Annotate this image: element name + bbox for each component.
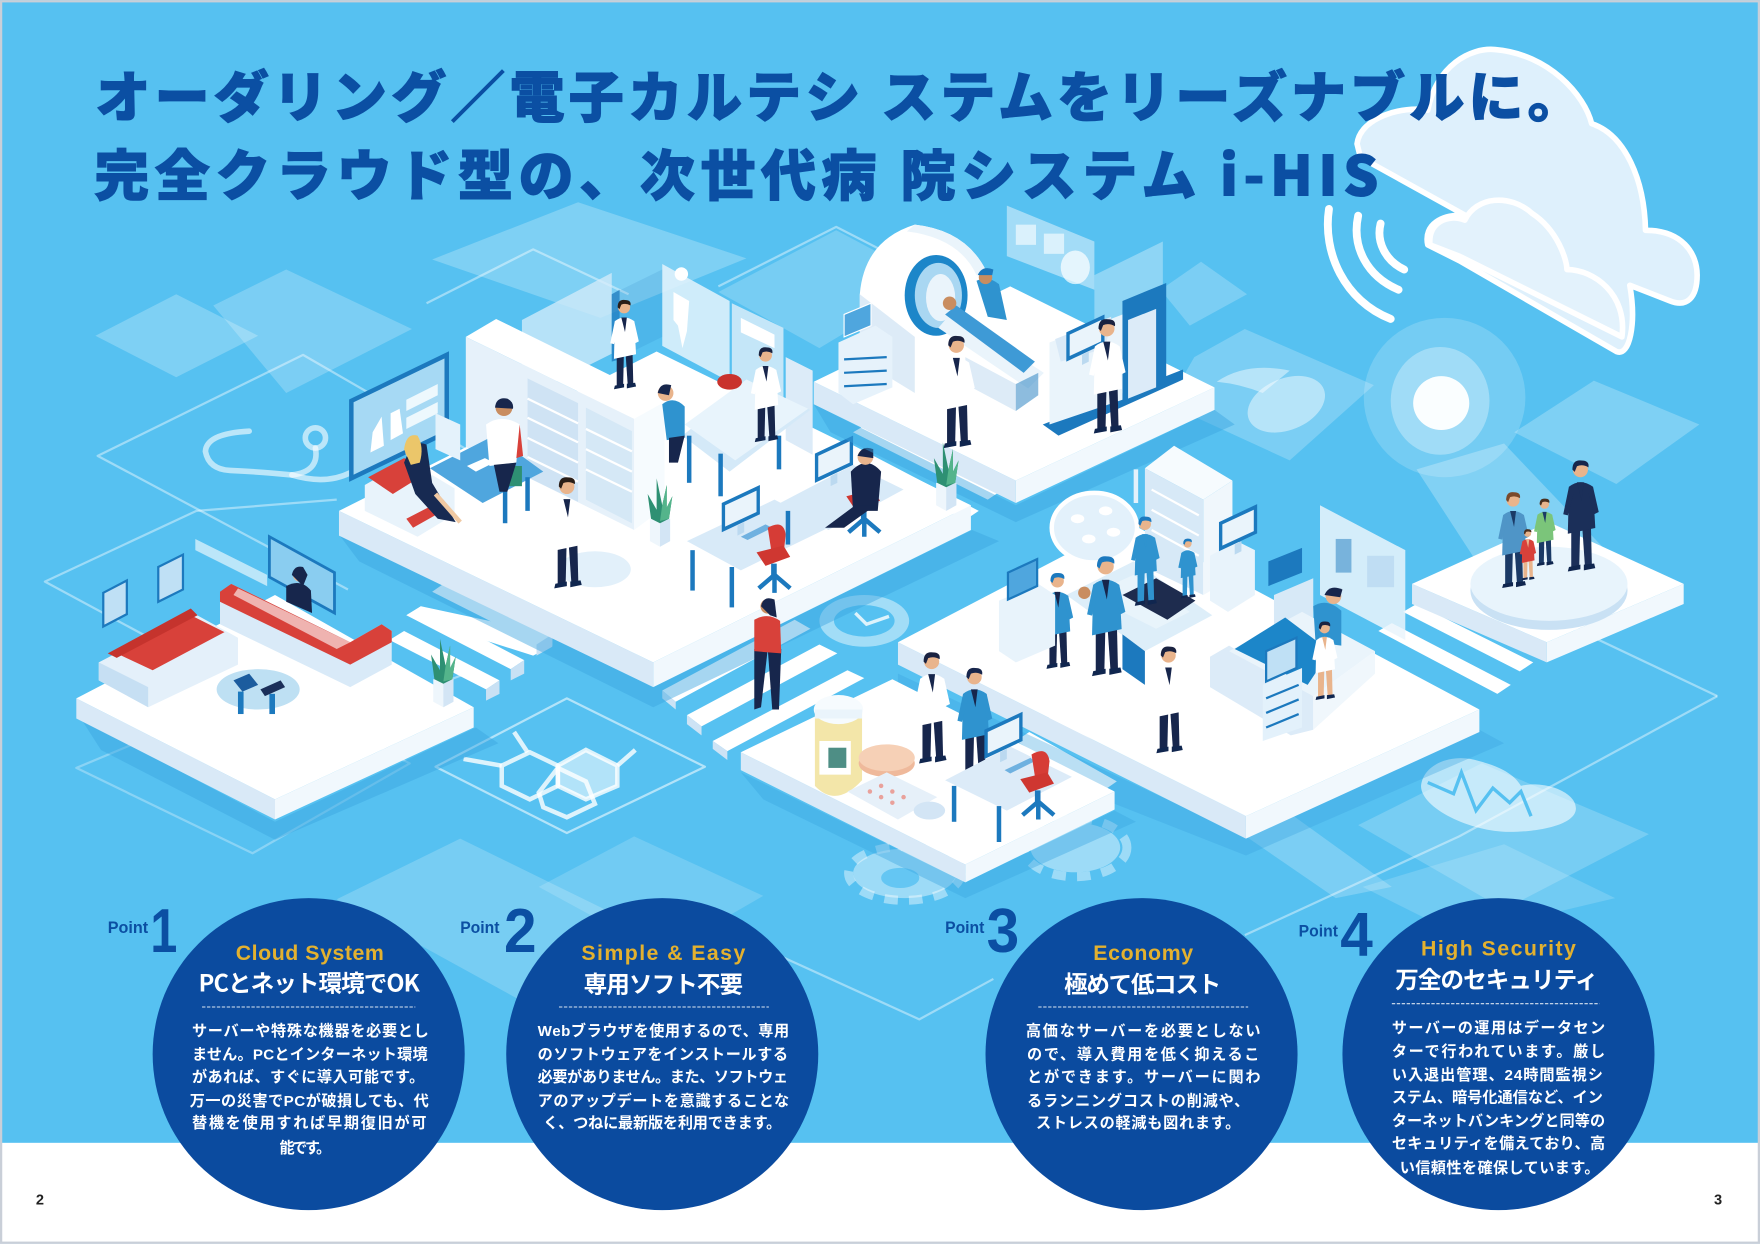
circle 1 [153,898,465,1210]
panel: Point 3: Economy [1093,941,1193,965]
plant [431,639,456,707]
pharmacist [914,652,950,763]
scanner bed with patient [938,296,1044,411]
panel: Point 1: ません。PCとインターネット環境 [192,1047,428,1064]
title: 完全クラウド型の、次世代病 院システム i-HIS [94,131,1378,211]
panel: Point 4: い入退出管理、24時間監視シ [1392,1066,1603,1084]
receptionist [286,567,312,613]
desk with computer [687,485,828,607]
panel: Point 1: Point [108,918,149,937]
panel: Point 1: サーバーや特殊な機器を必要とし [192,1022,429,1040]
platform: pharmacy [741,652,1136,898]
surgeons team [1043,517,1197,676]
platform: MRI room [814,206,1235,522]
panel: Point 2: Simple & Easy [581,941,745,965]
connector steps [389,424,1533,791]
patient doctor in blue [1313,588,1342,646]
pharmacy chair [1020,751,1054,820]
page number right: 3 [1714,1193,1722,1209]
plant by shelves [648,478,672,547]
panel: Point 2: 2 [504,897,537,966]
title: オーダリング／電子カルテシ ステムをリーズナブルに。 [95,53,1583,133]
platform: main clinic [339,264,999,707]
left cart with screen [999,559,1055,662]
icon: wifi waves [1328,209,1404,319]
walking doctor [550,477,585,588]
panel: Point 3: ストレスの軽減も図れます。 [1036,1114,1240,1132]
background translucent panels [95,202,1699,1010]
circle 4 [1342,898,1654,1210]
panel: Point 1: があれば、すぐに導入可能です。 [192,1068,424,1086]
panel: Point 4: 万全のセキュリティ [1395,961,1598,995]
panel: Point 3: とができます。サーバーに関わ [1027,1068,1261,1086]
panel: Point 1: PCとネット環境でOK [199,964,421,998]
panel: Point 3: Point [945,918,985,937]
server rack [1145,446,1232,595]
MRI machine [860,225,988,393]
panel: Point 1 [108,897,465,1210]
hospital bed [1210,612,1375,741]
doctor upstairs [610,300,639,389]
signal beam [1364,318,1616,578]
panel: Point 3: 3 [987,897,1019,966]
panel: Point 4: 4 [1340,900,1373,969]
consulting sofa and patient [365,435,460,537]
title [94,53,1583,211]
panel: Point 3: ので、導入費用を低く抑えるこ [1027,1046,1259,1064]
control console [1043,283,1183,436]
panel: Point 2: 専用ソフト不要 [584,965,743,999]
panel: Point 4: ターで行われています。厳し [1392,1042,1605,1060]
icon: heart with pulse [1421,758,1576,832]
panel: Point 2: のソフトウェアをインストールする [538,1047,788,1064]
reception desk [220,584,392,687]
panel: Point 4 [1299,898,1654,1210]
panel: Point 3: 高価なサーバーを必要としない [1026,1022,1261,1040]
seated doctor at computer with red chair [825,448,881,537]
page number left: 2 [36,1193,44,1209]
walking doctor [939,336,975,448]
panel: Point 2: アのアップデートを意識することな [538,1092,789,1110]
glass panels [1007,206,1163,387]
screen behind reception [269,537,334,613]
icon: gears [849,818,1127,900]
icon: mouse and lungs ghost [1217,365,1333,443]
doctor at consulting desk [486,398,523,492]
panel: Point 3: 極めて低コスト [1064,965,1221,999]
wall pictures [103,539,267,626]
surgical cart [1210,504,1257,612]
icon: clock [819,595,909,647]
disc [1470,547,1628,630]
upstairs desk [682,374,810,496]
console doctor [1089,319,1126,434]
circle 3 [986,898,1298,1210]
platform: family [1412,460,1684,662]
panel: Point 1: 1 [150,897,177,966]
panel: Point 1: 替機を使用すれば早期復旧が可 [192,1114,427,1132]
pills [847,744,945,820]
consulting desk [430,413,543,523]
walking doctor [1152,646,1186,753]
nurse at bed [1312,621,1337,700]
pharmacy desk [945,712,1072,842]
plant [934,442,959,511]
panel: Point 4: ターネットバンキングと同等の [1392,1112,1605,1130]
MRI nurse [977,268,1007,320]
panel: Point 4: い信頼性を確保しています。 [1400,1159,1599,1177]
coffee table [217,669,300,714]
operating table and patient [1066,561,1212,685]
sofa [99,609,238,707]
nurse [751,347,781,442]
panel: Point 2 [460,897,818,1210]
pill bottle [814,695,863,796]
panel: Point 4: ステム、暗号化通信など、イン [1392,1089,1603,1106]
floor logo [559,551,631,587]
back glass wall with anatomy chart [522,264,783,402]
panel: Point 3 [945,897,1298,1210]
panel: Point 4: セキュリティを備えており、高 [1392,1135,1605,1152]
panel: Point 2: く、つねに最新版を利用できます。 [543,1115,781,1132]
patient charts glass [1268,505,1405,646]
shelf wall block [466,319,664,530]
desk with computer rear [780,436,904,545]
panel: Point 3: るランニングコストの削減や、 [1027,1092,1249,1110]
wall screen with lungs [351,355,447,478]
panel: Point 1: 能です。 [279,1139,331,1157]
white footer band [0,1143,1760,1244]
MRI cart [838,303,892,404]
panel: Point 1: Cloud System [236,941,384,965]
icon: stethoscope [205,428,350,480]
family [1498,460,1599,588]
panel: Point 2: 必要がありません。また、ソフトウェ [538,1068,788,1086]
platform: surgery and ward [898,446,1504,855]
walking woman [754,598,781,710]
seated doctor blue [658,384,685,463]
panel: Point 2: Webブラウザを使用するので、専用 [538,1022,789,1040]
back right partition [786,357,813,455]
panel: Point 4: High Security [1421,936,1576,960]
panel: Point 2: Point [460,918,500,937]
panel: Point 4: Point [1299,921,1338,940]
panel: Point 4: サーバーの運用はデータセン [1392,1019,1605,1037]
circle 2 [506,898,818,1210]
red office chair [757,524,790,593]
surgical lamp [1052,469,1138,563]
patient man [957,668,992,777]
background outline panels [45,227,1717,1019]
icon: molecule hexagons [464,732,635,817]
icon: cloud [1357,49,1697,352]
platform: reception [76,537,498,840]
panel: Point 1: 万一の災害でPCが破損しても、代 [190,1092,429,1110]
